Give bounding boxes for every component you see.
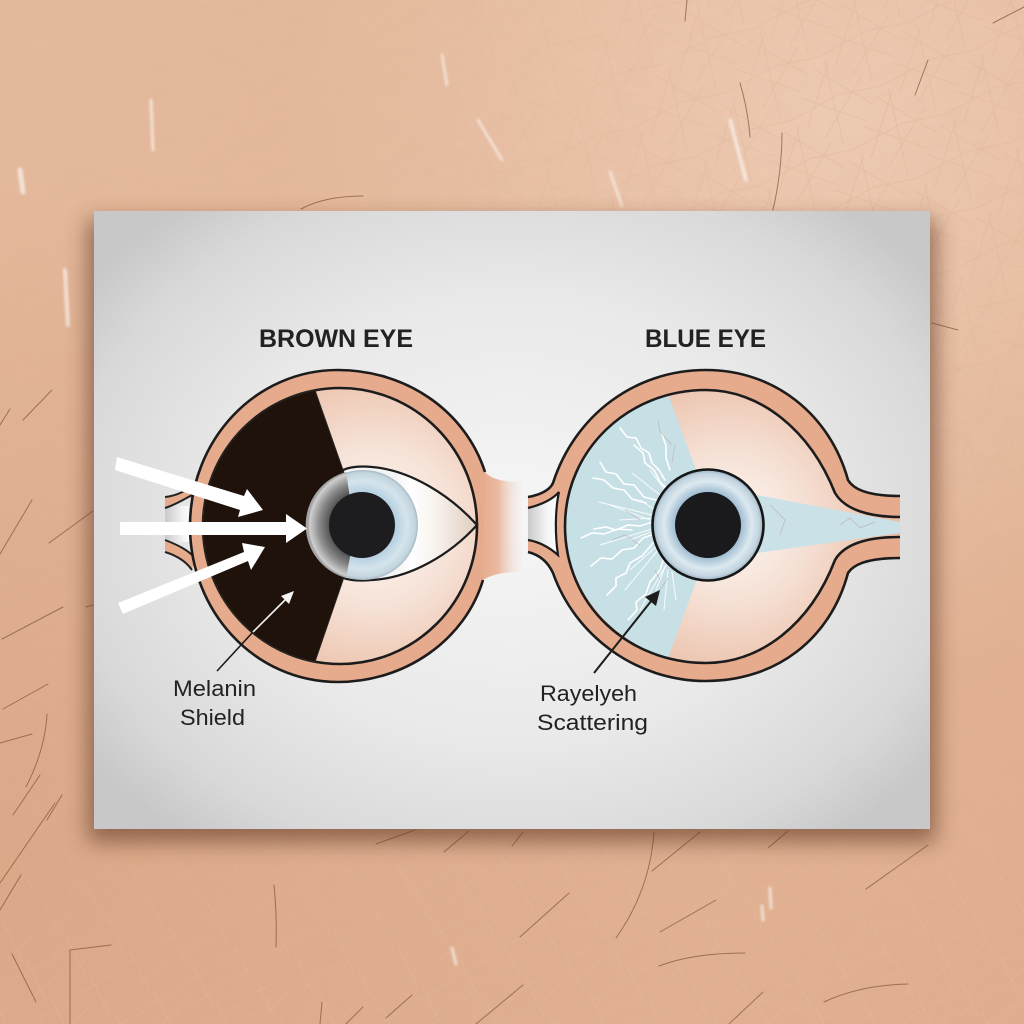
outer sclera wall: [190, 370, 485, 682]
inner chamber: [203, 388, 477, 664]
pupil: [329, 492, 395, 558]
heading: brown eye: BROWN EYE: [259, 325, 413, 353]
outer outline: [528, 370, 900, 681]
label: melanin shield: [173, 676, 256, 730]
lens almond: [343, 466, 477, 581]
card shadow: [88, 220, 936, 842]
heading: blue eye: BLUE EYE: [645, 325, 766, 353]
optic nerve stub: [478, 470, 522, 582]
arrow: lower light ray: [118, 543, 265, 614]
left channel outline: [528, 492, 559, 555]
arrow: middle light ray: [120, 514, 307, 543]
pupil: [675, 492, 741, 558]
diagram: brown eye: [165, 370, 522, 682]
blue scattering sector: [566, 394, 696, 658]
faint vein marks: [612, 420, 875, 590]
label: rayleigh scattering: Rayelyeh: [540, 681, 637, 706]
melanin shield sector: [203, 390, 343, 662]
diagram: blue eye: [528, 370, 900, 681]
outer sclera wall: [528, 370, 900, 681]
arrow: upper light ray: [115, 457, 263, 517]
inner chamber: [565, 390, 900, 663]
label: rayleigh scattering: Scattering: [537, 710, 648, 735]
inner chamber outline: [565, 390, 900, 663]
light arrows entering brown eye: [115, 457, 307, 614]
iris shaded half: [306, 472, 351, 578]
left channel of brown eye: [165, 484, 195, 570]
arrow: rayleigh scattering pointer: [594, 590, 660, 673]
label: melanin shield: Shield: [180, 705, 245, 730]
panel: grey card: [94, 211, 930, 829]
label: melanin shield: Melanin: [173, 676, 256, 701]
iris: [308, 470, 418, 580]
arrow: melanin shield pointer: [217, 591, 294, 671]
label: rayleigh scattering: [537, 681, 648, 735]
scattering wisps: [581, 428, 676, 620]
left channel gap: [528, 492, 559, 555]
blue light cone: [757, 495, 900, 553]
iris: [652, 470, 764, 580]
